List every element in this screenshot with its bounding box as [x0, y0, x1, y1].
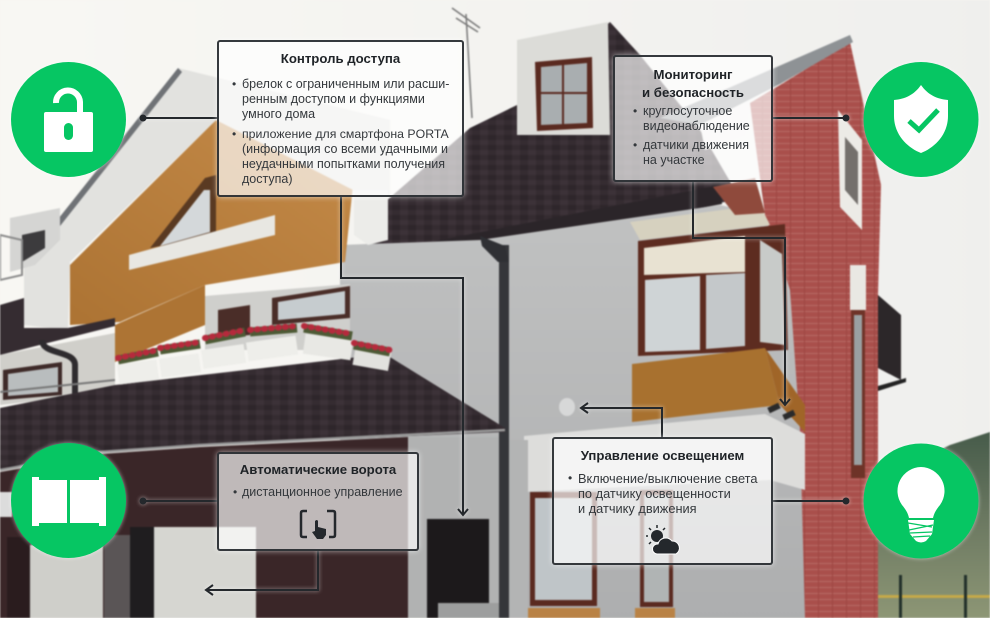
text: access control bullets: ренным доступом и функциями [242, 92, 425, 106]
text: lighting bullets: и датчику движения [578, 501, 697, 516]
connector: access panel to door [341, 197, 468, 515]
pointer: gates icon [140, 498, 218, 504]
icon: open padlock [11, 62, 126, 177]
text: lighting bullets: по датчику освещенности [578, 486, 731, 501]
icon: double gate [11, 443, 126, 558]
pointer: lighting icon [772, 498, 850, 504]
text: monitoring bullets: на участке [643, 153, 705, 167]
text: access control bullets: • [232, 77, 236, 91]
connector: gates panel to garage door [206, 550, 318, 595]
heading: automatic gates: Автоматические ворота [240, 462, 396, 477]
panel: lighting control [552, 437, 773, 565]
icon: light bulb [864, 444, 978, 558]
panel: automatic gates [217, 452, 419, 551]
text: monitoring bullets: круглосуточное [643, 104, 732, 118]
text: monitoring bullets [633, 104, 750, 167]
text: access control bullets: приложение для смартфона PORTA [242, 127, 449, 141]
panel: access control [217, 40, 464, 197]
text: remote control: • [233, 485, 237, 499]
heading: monitoring and security [642, 67, 744, 100]
heading: lighting control: Управление освещением [581, 448, 744, 463]
pointer: access icon [140, 114, 218, 122]
pointer: security icon [772, 114, 850, 122]
text: access control bullets [232, 77, 449, 186]
connector: lighting panel to sensor [581, 403, 662, 438]
text: access control bullets: доступа) [242, 172, 292, 186]
text: monitoring bullets: • [633, 104, 637, 118]
text: access control bullets: • [232, 127, 236, 141]
icon: sun and cloud [646, 525, 680, 554]
heading: access control: Контроль доступа [281, 51, 400, 66]
panel: monitoring and security [613, 55, 773, 182]
heading: monitoring and security: Мониторинг [653, 67, 733, 82]
text: access control bullets: умного дома [242, 107, 315, 121]
text: monitoring bullets: • [633, 138, 637, 152]
text: monitoring bullets: датчики движения [643, 138, 749, 152]
connector: monitoring panel to cameras [693, 181, 790, 405]
icon: touch tablet [300, 510, 336, 539]
text: access control bullets: (информация со всеми удачными и [242, 142, 448, 156]
text: monitoring bullets: видеонаблюдение [643, 119, 750, 133]
icon: shield with check [864, 62, 978, 177]
text: lighting bullets: • [568, 471, 572, 485]
text: access control bullets: неудачными попытками получения [242, 157, 445, 171]
text: access control bullets: брелок с ограниченным или расши- [242, 77, 449, 91]
text: lighting bullets: Включение/выключение света [578, 471, 758, 486]
text: lighting bullets [568, 471, 758, 516]
heading: monitoring and security: и безопасность [642, 85, 744, 100]
text: remote control: дистанционное управление [242, 485, 403, 499]
